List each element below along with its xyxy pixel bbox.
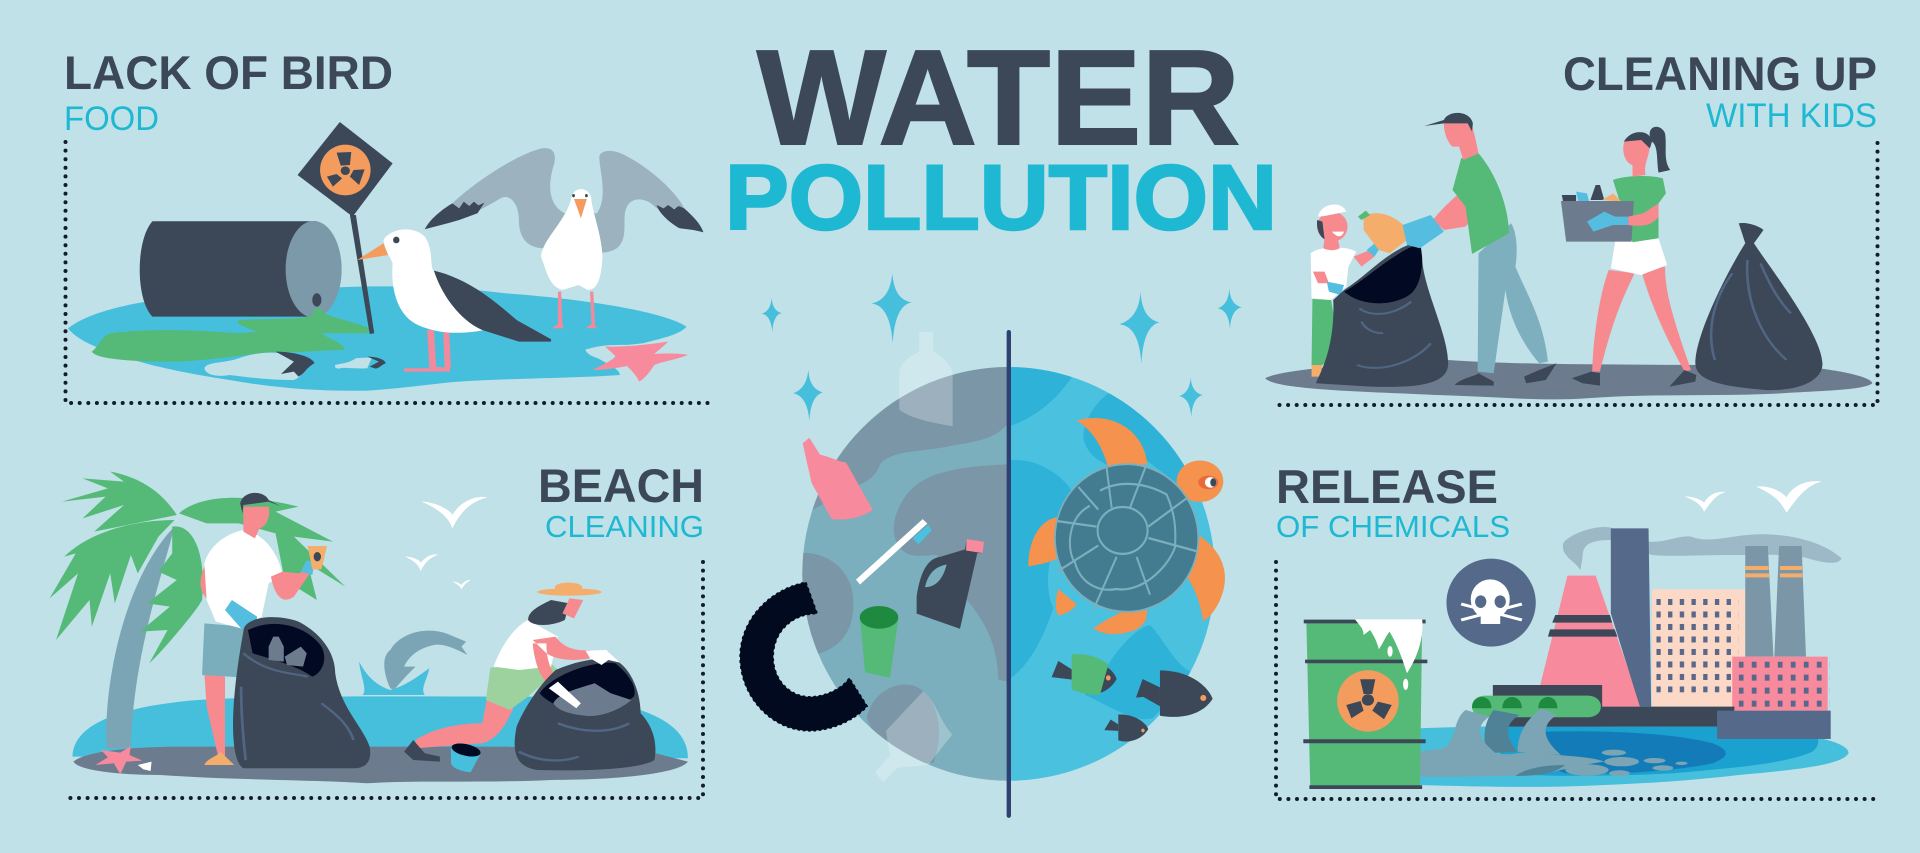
clean half of globe bbox=[1009, 355, 1220, 782]
large fish bbox=[1136, 670, 1213, 717]
sandy ground bbox=[73, 747, 688, 783]
orange jug bbox=[1358, 211, 1407, 253]
heading: lack of bird food: FOOD bbox=[64, 100, 159, 138]
foam on water bbox=[1565, 750, 1688, 776]
warning sign with radiation symbol bbox=[298, 122, 393, 334]
detergent bottle bbox=[917, 539, 984, 629]
sea turtle bbox=[1028, 418, 1225, 634]
pink bottle bbox=[803, 438, 873, 520]
title bbox=[725, 22, 1277, 249]
title: POLLUTION bbox=[725, 147, 1277, 249]
dividing line bbox=[1007, 330, 1011, 818]
green discharge pipe bbox=[1472, 696, 1601, 717]
small fish bbox=[1104, 715, 1148, 741]
heading: cleaning up with kids: CLEANING UP bbox=[1563, 47, 1877, 100]
tied trash bag bbox=[1695, 223, 1822, 390]
man in green shirt and cap bbox=[1403, 113, 1557, 386]
sea bbox=[73, 696, 688, 758]
palm tree bbox=[50, 472, 345, 748]
bucket bbox=[449, 741, 483, 772]
heading: release of chemicals: OF CHEMICALS bbox=[1276, 509, 1510, 544]
panel: release of chemicals bbox=[1276, 460, 1877, 799]
heading: release of chemicals bbox=[1276, 460, 1510, 544]
title: WATER bbox=[757, 22, 1240, 173]
heading: cleaning up with kids: WITH KIDS bbox=[1706, 97, 1877, 135]
panel: lack of bird food bbox=[64, 46, 712, 403]
discarded tire bbox=[740, 582, 867, 731]
translucent plastic bottle top bbox=[899, 332, 953, 426]
panel: divided earth globe bbox=[740, 273, 1242, 818]
heading: lack of bird food bbox=[64, 46, 393, 138]
second seagull with open wings bbox=[425, 148, 703, 328]
illustration: factory releasing chemicals bbox=[1303, 481, 1849, 789]
heading: release of chemicals: RELEASE bbox=[1276, 460, 1498, 513]
foreground seagull bbox=[357, 229, 551, 372]
seagulls bbox=[1685, 481, 1822, 513]
dead fish bbox=[204, 352, 386, 380]
full trash bag bbox=[515, 650, 655, 770]
illustration: people cleaning a beach bbox=[50, 472, 688, 783]
heading: beach cleaning: CLEANING bbox=[545, 509, 704, 544]
translucent plastic bottle bottom bbox=[875, 691, 952, 782]
woman in sun hat bbox=[404, 583, 602, 762]
woman carrying box bbox=[1561, 127, 1696, 387]
trash bag held open bbox=[1316, 242, 1448, 387]
green cup bbox=[860, 606, 898, 678]
toothbrush bbox=[856, 519, 932, 584]
barrel bbox=[140, 221, 342, 318]
heading: cleaning up with kids bbox=[1563, 47, 1877, 135]
leaping dolphin with splash bbox=[359, 631, 467, 695]
man holding cup bbox=[200, 493, 327, 765]
seagulls bbox=[405, 497, 488, 589]
heading: lack of bird food: LACK OF BIRD bbox=[64, 46, 393, 99]
toxic barrel bbox=[1303, 619, 1427, 789]
factory buildings bbox=[1493, 528, 1831, 739]
panel: beach cleaning bbox=[50, 459, 704, 798]
waste streams bbox=[1420, 708, 1604, 777]
water puddle bbox=[68, 286, 687, 391]
polluted half of globe bbox=[802, 367, 1007, 781]
fish with cup bbox=[1052, 654, 1117, 695]
starfish bbox=[585, 342, 688, 382]
polluted water bbox=[1420, 726, 1849, 787]
illustration: family picking up litter bbox=[1265, 113, 1872, 399]
ground bbox=[1265, 360, 1872, 399]
heading: beach cleaning: BEACH bbox=[538, 459, 704, 512]
child bbox=[1311, 205, 1383, 377]
panel: cleaning up with kids bbox=[1265, 47, 1878, 405]
open trash bag with bottles bbox=[233, 617, 370, 768]
illustration: polluted water with seagulls bbox=[68, 122, 703, 391]
green oil spill bbox=[92, 308, 370, 362]
skull and crossbones badge bbox=[1446, 559, 1536, 647]
factory smoke bbox=[1563, 527, 1842, 570]
starfish and shell bbox=[96, 746, 152, 774]
heading: beach cleaning bbox=[538, 459, 704, 544]
sparkles bbox=[762, 273, 1242, 421]
